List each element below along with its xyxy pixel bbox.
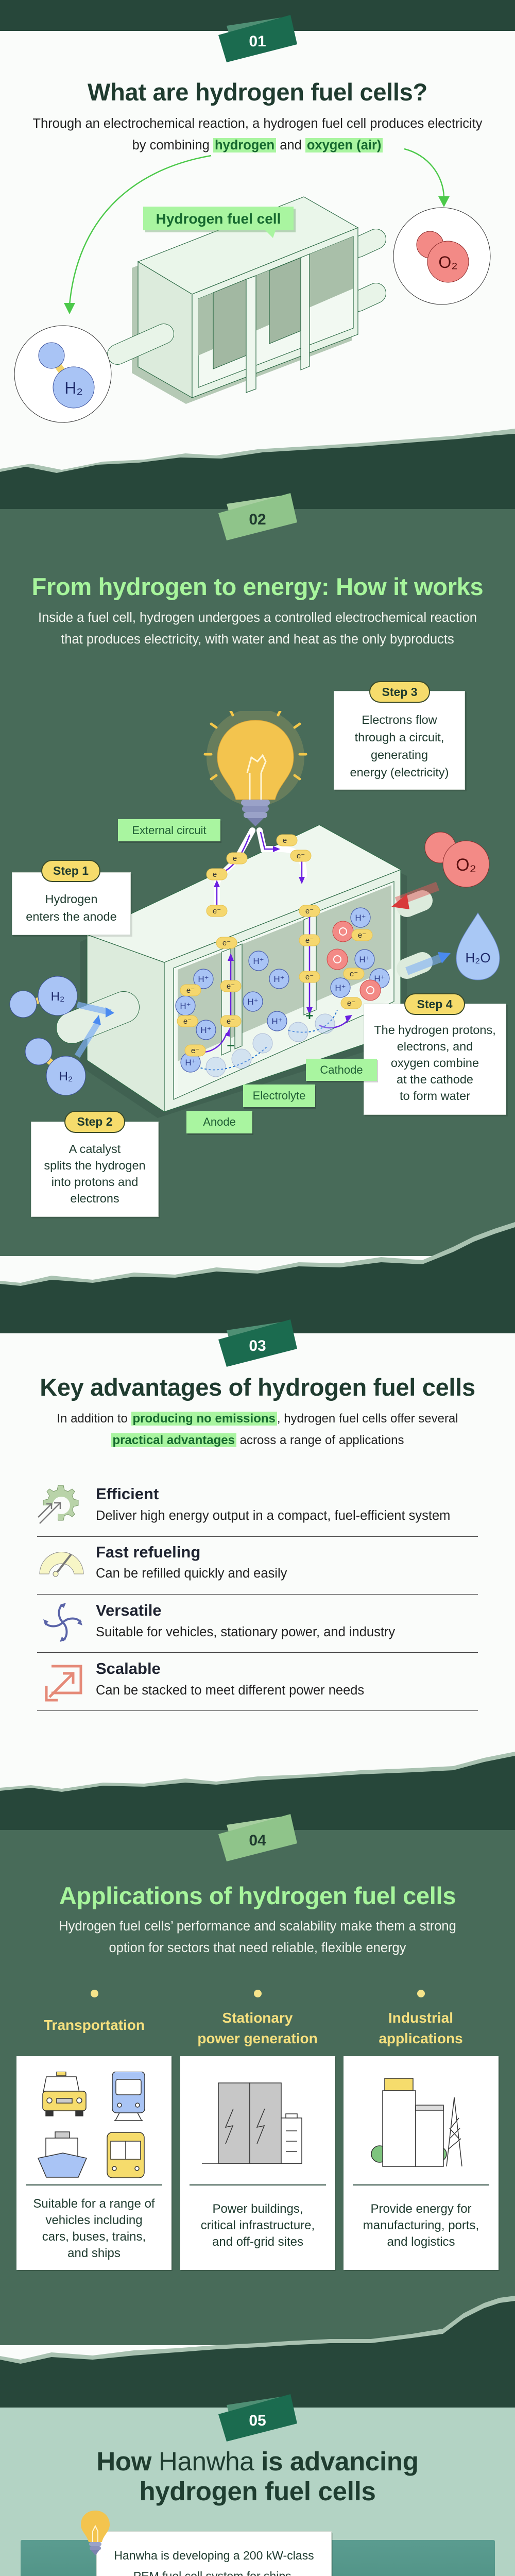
subtitle 2: Inside a fuel cell, hydrogen undergoes a controlled electrochemical reaction — [38, 611, 477, 625]
text: transportation — [33, 2197, 155, 2260]
row: fast refueling: Can be refilled quickly and easily — [96, 1566, 287, 1581]
icons: vehicles — [38, 2072, 145, 2178]
step 3: Electrons flow — [362, 713, 437, 726]
icon: O2 molecule: O₂ — [438, 253, 458, 272]
subtitle 1: by combining hydrogen and oxygen (air) — [132, 138, 381, 152]
row: fast refueling — [37, 1537, 478, 1595]
panel: ship scene — [21, 2540, 495, 2576]
step 3: through a circuit, — [355, 731, 444, 744]
row: versatile: Suitable for vehicles, stationary power, and industry — [96, 1625, 395, 1639]
row: scalable: Scalable — [96, 1659, 161, 1677]
electrons: + — [305, 1008, 314, 1023]
callout 1 — [96, 2531, 333, 2576]
subtitle 3: In addition to producing no emissions, hydrogen fuel cells offer several — [57, 1412, 458, 1426]
row: efficient — [37, 1476, 478, 1537]
label: external circuit — [118, 819, 220, 841]
title 5 — [96, 2447, 419, 2506]
electrons: e⁻ — [183, 1017, 192, 1026]
electrons: e⁻ — [227, 982, 235, 991]
badge 02 — [218, 493, 297, 540]
electrons: e⁻ — [186, 986, 195, 995]
label: anode — [186, 1111, 252, 1133]
badge 03 — [218, 1319, 297, 1367]
step 2: electrons — [70, 1192, 119, 1205]
pill: step 3: Step 3 — [382, 685, 418, 699]
card: industrial — [344, 2056, 499, 2270]
subtitle 4: Hydrogen fuel cells’ performance and scalability make them a strong — [59, 1919, 456, 1934]
electrons: e⁻ — [283, 836, 291, 845]
row: efficient: Deliver high energy output in a compact, fuel-efficient system — [96, 1509, 450, 1523]
heading: industrial: Industrial — [388, 2010, 453, 2026]
electrons: e⁻ — [227, 1017, 235, 1026]
pill: step 2 — [64, 1111, 125, 1133]
step 4: at the cathode — [397, 1073, 473, 1086]
icon: swirl arrows — [43, 1603, 82, 1642]
icon: O2 molecule — [393, 208, 490, 304]
H+ protons: H⁺ — [253, 956, 264, 966]
badge 04 — [218, 1814, 297, 1861]
callout 1: Hanwha is developing a 200 kW-class — [114, 2549, 314, 2562]
subtitle 3 — [57, 1412, 458, 1447]
card: transportation — [16, 2056, 171, 2270]
electrons: e⁻ — [233, 854, 241, 863]
H+ protons: H⁺ — [273, 974, 285, 984]
row: versatile — [37, 1595, 478, 1653]
subtitle 1: Through an electrochemical reaction, a hydrogen fuel cell produces electricity — [32, 116, 483, 131]
electrons: e⁻ — [305, 907, 314, 916]
pill: step 1: Step 1 — [53, 864, 89, 877]
icon: bulb 1 — [81, 2511, 110, 2555]
diagram: how it works — [9, 711, 500, 1118]
icon: light bulb — [205, 702, 306, 826]
subtitle 4 — [59, 1919, 456, 1955]
electrons: e⁻ — [222, 939, 231, 947]
electrons: e⁻ — [305, 973, 314, 981]
H+ protons: H⁺ — [335, 983, 346, 993]
badge 03: 03 — [249, 1337, 266, 1354]
subtitle 2: that produces electricity, with water and heat as the only byproducts — [61, 632, 454, 647]
H+ protons: H⁺ — [359, 955, 370, 964]
H+ protons: H⁺ — [198, 974, 209, 984]
label: hydrogen fuel cell — [143, 207, 296, 238]
text: transportation: and ships — [67, 2246, 121, 2260]
pill: step 3 — [369, 681, 430, 703]
fuel cell box — [117, 197, 376, 404]
step 4: The hydrogen protons, — [374, 1023, 496, 1037]
text: industrial: and logistics — [387, 2235, 455, 2249]
step 2: splits the hydrogen — [44, 1159, 146, 1172]
electrons: e⁻ — [213, 907, 221, 916]
electrons: e⁻ — [297, 852, 305, 860]
heading: stationary — [197, 2010, 318, 2046]
badge 04: 04 — [249, 1832, 266, 1849]
icon: gear — [38, 1485, 78, 1524]
step 2: into protons and — [52, 1175, 138, 1189]
arrow: wires from bulb — [197, 831, 350, 1070]
row: scalable — [37, 1653, 478, 1711]
label: external circuit: External circuit — [132, 824, 207, 837]
step 3: generating — [371, 748, 428, 761]
label: hydrogen fuel cell: Hydrogen fuel cell — [156, 211, 281, 227]
electrons: e⁻ — [358, 931, 366, 940]
text: stationary — [201, 2202, 315, 2249]
row: scalable: Can be stacked to meet different power needs — [96, 1683, 364, 1698]
icon: O2 entering — [391, 832, 489, 909]
label: cathode — [306, 1059, 377, 1081]
badge 02: 02 — [249, 511, 266, 528]
badge 01: 01 — [249, 33, 266, 50]
fuel cell box — [80, 825, 407, 1118]
subtitle 3: practical advantages across a range of applications — [112, 1433, 404, 1447]
subtitle 4: option for sectors that need reliable, flexible energy — [109, 1941, 406, 1955]
H+ protons: H⁺ — [185, 1058, 196, 1067]
step 4: electrons, and — [397, 1040, 473, 1053]
H+ protons: H⁺ — [200, 1025, 212, 1035]
H+ protons: H⁺ — [374, 974, 385, 984]
electrons: e⁻ — [213, 870, 221, 879]
electrons: − — [227, 1038, 235, 1053]
icon: gauge — [39, 1552, 83, 1577]
text: transportation: cars, buses, trains, — [42, 2230, 146, 2244]
step 4: to form water — [400, 1089, 470, 1103]
step 4: oxygen combine — [391, 1056, 479, 1070]
step 3: energy (electricity) — [350, 766, 449, 779]
text: industrial — [363, 2202, 479, 2249]
arrow: to O2 — [404, 149, 450, 207]
icon: industrial buildings — [371, 2078, 462, 2167]
text: stationary: critical infrastructure, — [201, 2218, 315, 2232]
heading: stationary: power generation — [197, 2030, 318, 2046]
text: industrial: Provide energy for — [370, 2202, 472, 2216]
title 4: Applications of hydrogen fuel cells — [59, 1882, 456, 1909]
icon: H2 molecules entering: H₂ — [51, 990, 64, 1004]
pill: step 4 — [404, 993, 465, 1015]
oxygen atoms — [327, 921, 381, 1001]
badge 05 — [218, 2394, 297, 2442]
heading: industrial — [379, 2010, 463, 2046]
pill: step 1 — [41, 860, 100, 882]
title 1: What are hydrogen fuel cells? — [88, 78, 427, 106]
text: transportation: vehicles including — [45, 2213, 143, 2227]
row: efficient: Efficient — [96, 1485, 159, 1503]
text: transportation: Suitable for a range of — [33, 2197, 155, 2211]
badge 01 — [218, 15, 297, 62]
icon: H2 molecules entering: H₂ — [59, 1070, 73, 1083]
H+ protons — [176, 908, 389, 1077]
electrons: e⁻ — [350, 970, 358, 978]
step 1 — [12, 872, 131, 935]
card: stationary power — [180, 2056, 335, 2270]
step 2: A catalyst — [69, 1142, 121, 1156]
electrons: e⁻ — [191, 1046, 199, 1055]
icon: H2O drop — [407, 913, 500, 980]
heading: transportation: Transportation — [44, 2017, 145, 2033]
pill: step 2: Step 2 — [77, 1115, 113, 1128]
electrons — [177, 835, 372, 1056]
title 5: hydrogen fuel cells — [139, 2477, 376, 2506]
arrow: to H2 — [64, 156, 211, 314]
icon: H2 molecule — [14, 326, 111, 422]
electrons: e⁻ — [347, 999, 355, 1008]
electrons: e⁻ — [305, 936, 314, 945]
title 5: How Hanwha is advancing — [96, 2447, 419, 2476]
row: versatile: Versatile — [96, 1601, 162, 1619]
step 4 — [364, 1004, 506, 1115]
subtitle 1 — [32, 116, 483, 152]
label: electrolyte — [243, 1084, 315, 1107]
text: industrial: manufacturing, ports, — [363, 2218, 479, 2232]
pipes — [72, 901, 422, 1028]
label: anode: Anode — [203, 1115, 236, 1128]
H+ protons: H⁺ — [355, 913, 366, 923]
label: electrolyte: Electrolyte — [253, 1089, 305, 1102]
advantages list — [37, 1485, 478, 1711]
icon: scale — [45, 1665, 82, 1701]
H+ protons: H⁺ — [247, 997, 259, 1007]
text: stationary: Power buildings, — [212, 2202, 303, 2216]
icon: H2 molecule: H₂ — [64, 379, 83, 397]
row: fast refueling: Fast refueling — [96, 1543, 200, 1561]
icon: H2O drop: H₂O — [465, 950, 491, 965]
heading: stationary: Stationary — [222, 2010, 293, 2026]
icon: H2 molecules entering — [10, 976, 114, 1095]
step 1: enters the anode — [26, 910, 117, 923]
H+ protons: H⁺ — [271, 1016, 283, 1026]
title 2: From hydrogen to energy: How it works — [32, 573, 483, 600]
badge 05: 05 — [249, 2412, 266, 2429]
title 3: Key advantages of hydrogen fuel cells — [40, 1374, 475, 1401]
H+ protons: H⁺ — [180, 1001, 191, 1011]
pill: step 4: Step 4 — [417, 997, 453, 1011]
icon: power cabinet — [202, 2082, 302, 2164]
step 2 — [31, 1122, 159, 1217]
illustration: hydrogen fuel cell — [14, 148, 490, 422]
text: stationary: and off-grid sites — [212, 2235, 303, 2249]
step 1: Hydrogen — [45, 892, 97, 906]
subtitle 2 — [38, 611, 477, 647]
step 3 — [334, 691, 465, 790]
icon: O2 entering: O₂ — [456, 855, 476, 875]
label: cathode: Cathode — [320, 1063, 363, 1076]
heading: industrial: applications — [379, 2030, 463, 2046]
dots — [91, 1990, 425, 1997]
